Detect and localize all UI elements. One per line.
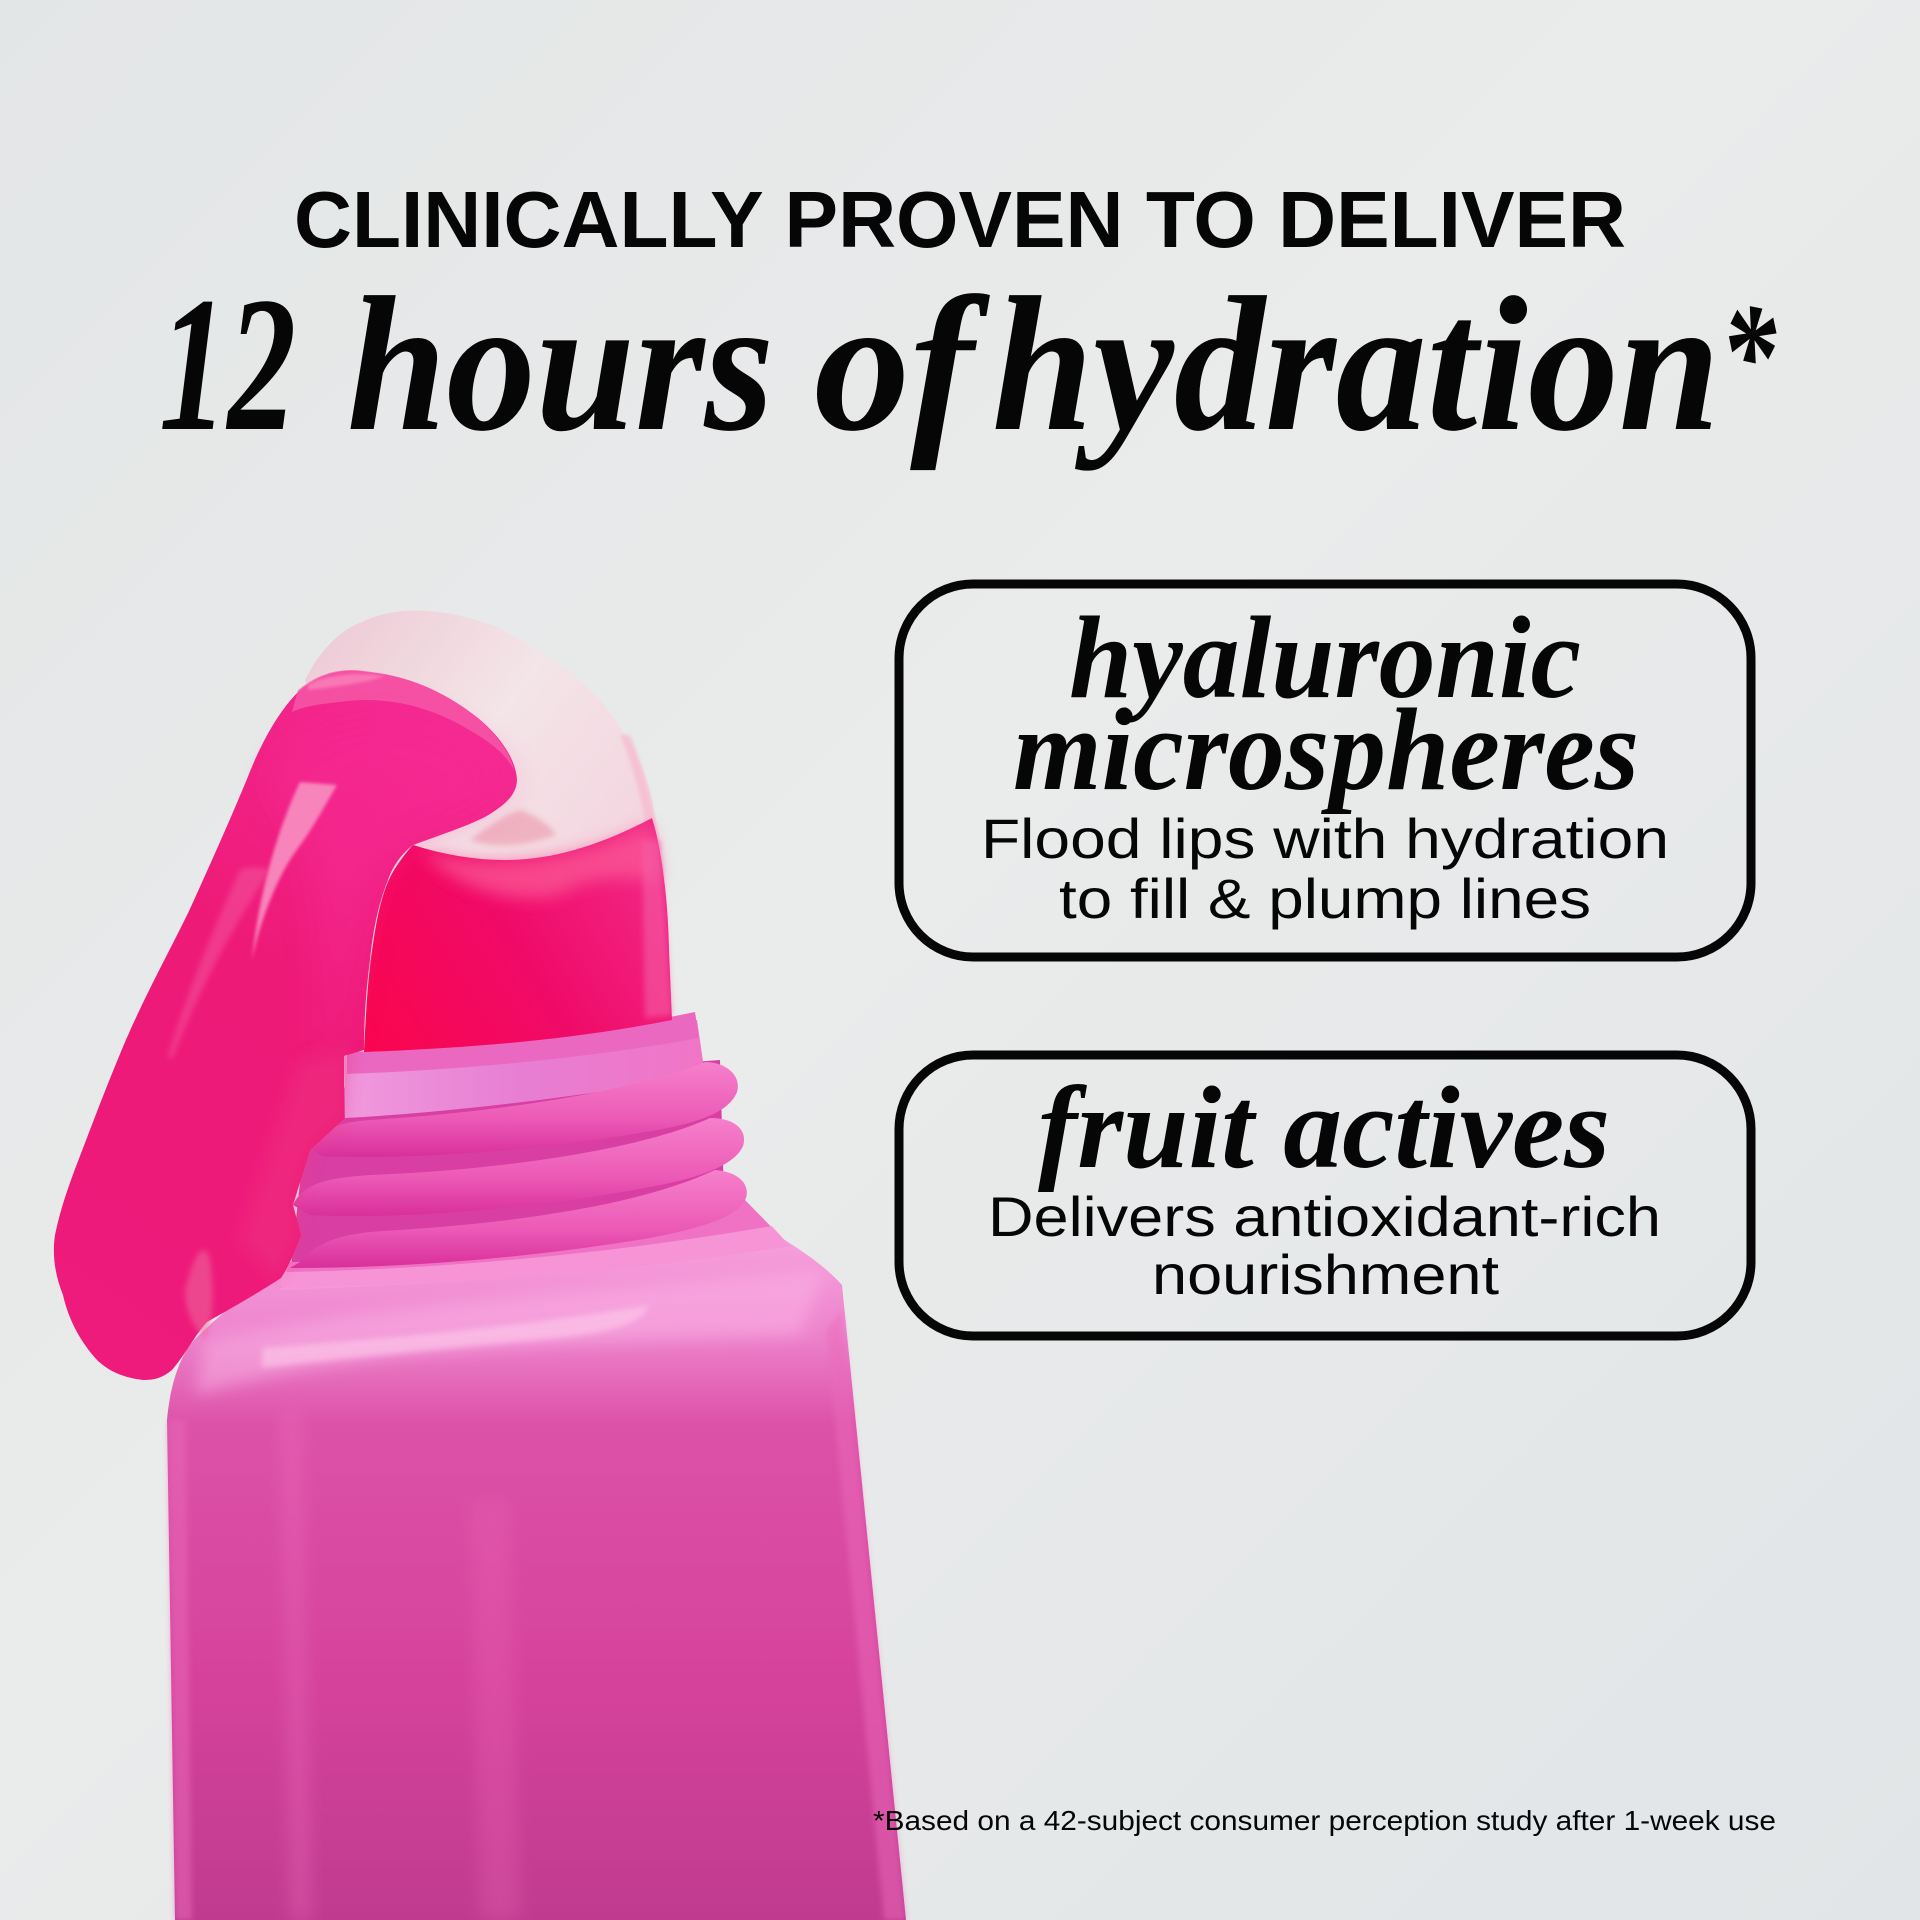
heading: 12 hours of hydration	[159, 257, 1777, 471]
callout border	[899, 1055, 1751, 1336]
callout: fruit actives	[899, 1055, 1751, 1336]
footnote: *Based on a 42-subject consumer perception study after 1-week use	[873, 1805, 1776, 1836]
clear applicator tip	[305, 610, 664, 880]
callout body	[988, 1185, 1661, 1306]
callout title: microspheres	[1013, 684, 1639, 815]
callout title	[1013, 592, 1639, 815]
callout title: fruit actives	[1038, 1062, 1610, 1193]
heading: 12 hours of hydration: hours	[347, 257, 774, 471]
heading: 12 hours of hydration: *	[1720, 273, 1777, 436]
callout: hyaluronic microspheres	[899, 584, 1751, 957]
callout body: nourishment	[1152, 1243, 1499, 1306]
heading: 12 hours of hydration: 12	[159, 257, 296, 471]
callout body: Flood lips with hydration	[981, 807, 1669, 870]
heading: 12 hours of hydration: of	[814, 257, 991, 471]
heading: 12 hours of hydration: hydration	[992, 257, 1720, 471]
product photo: lip gloss tube	[54, 610, 906, 1920]
pink nozzle	[364, 818, 672, 1052]
threaded neck	[280, 1012, 790, 1290]
callout border	[899, 584, 1751, 957]
heading: clinically proven: CLINICALLY PROVEN TO DELIVER	[294, 175, 1626, 264]
pink gel squeeze	[54, 670, 517, 1380]
callout title: hyaluronic	[1069, 592, 1581, 723]
tube body	[167, 1215, 906, 1920]
callout body: to fill & plump lines	[1059, 867, 1591, 930]
callout body: Delivers antioxidant-rich	[988, 1185, 1661, 1248]
callout body	[981, 807, 1669, 930]
